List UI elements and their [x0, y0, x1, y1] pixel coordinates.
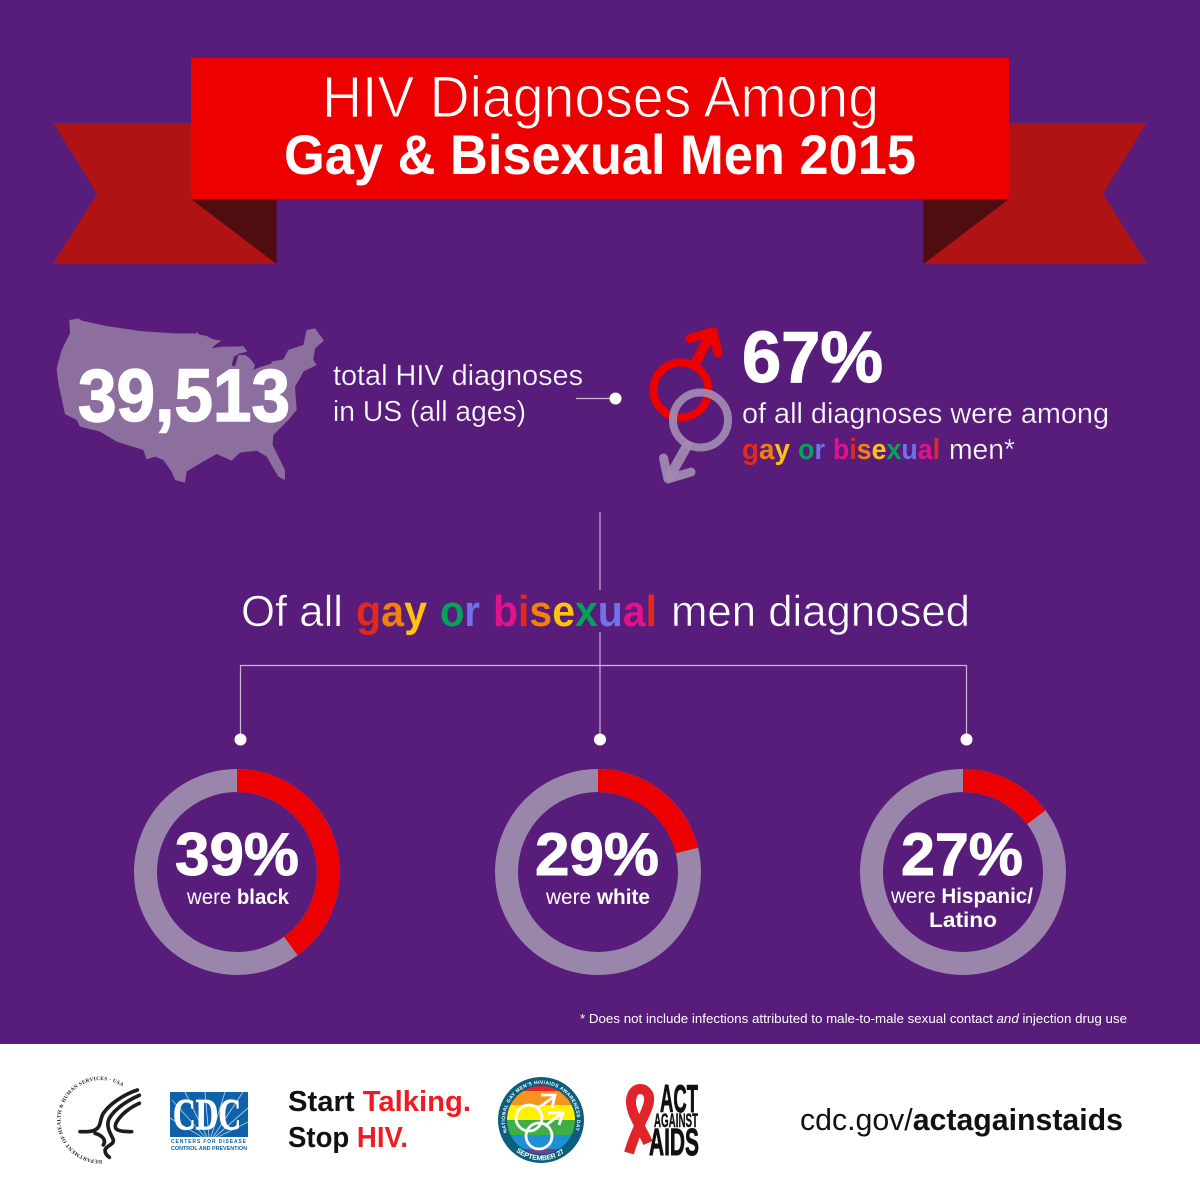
logo: CDC: CENTERS FOR DISEASE — [171, 1139, 247, 1145]
logo: National Gay Men's HIV/AIDS Awareness Day: SEPTEMBER 27 — [516, 1148, 563, 1160]
total diagnoses caption — [333, 360, 583, 428]
logo: Act Against AIDS — [629, 1078, 699, 1164]
donut: 29% white: were white — [545, 885, 650, 909]
section heading: or — [440, 587, 480, 636]
logo: National Gay Men's HIV/AIDS Awareness Day: NATIONAL GAY MEN'S HIV/AIDS AWARENESS DAY — [502, 1080, 580, 1134]
rainbow caption: or — [798, 434, 825, 466]
rainbow caption: men* — [949, 434, 1015, 466]
donut: 29% white — [506, 780, 690, 964]
section heading: men diagnosed — [671, 587, 970, 636]
section heading: bisexual — [493, 587, 657, 636]
stat: 67% — [742, 318, 1109, 430]
donut: 27% Hispanic/Latino — [872, 780, 1054, 964]
footnote: * Does not include infections attributed to male-to-male sexual contact and injection drug use — [580, 1011, 1127, 1026]
donut: 39% black — [146, 780, 328, 964]
title text — [284, 65, 916, 186]
logo: Start Talking. Stop HIV.: Stop HIV. — [288, 1122, 408, 1154]
section heading: Of all — [241, 587, 343, 636]
connector: total to 67% — [576, 392, 622, 404]
title banner — [53, 58, 1147, 264]
logo: National Gay Men's HIV/AIDS Awareness Day — [498, 1077, 584, 1163]
stat: 67%: 67% — [742, 318, 883, 398]
rainbow caption: gay — [742, 434, 790, 466]
logo: Start Talking. Stop HIV.: Start Talking. — [288, 1086, 471, 1118]
stat caption: of all diagnoses were among — [742, 398, 1109, 430]
logo: CDC: CDC — [173, 1090, 241, 1139]
donut: 29% white: 29% — [535, 821, 659, 888]
section heading: gay — [356, 587, 427, 636]
footer band — [0, 1044, 1200, 1201]
donut: 27% Hispanic/Latino: 27% — [901, 821, 1023, 888]
icon: male symbols — [654, 332, 728, 479]
rainbow caption: bisexual — [833, 434, 940, 466]
title text: Gay & Bisexual Men 2015 — [284, 123, 916, 186]
footer band: ACT — [660, 1078, 698, 1121]
US map with total diagnoses — [57, 318, 324, 483]
donut: 27% Hispanic/Latino: were Hispanic/ — [890, 884, 1033, 908]
logo: CDC — [170, 1090, 248, 1152]
rainbow caption — [742, 434, 1015, 466]
title text: HIV Diagnoses Among — [322, 65, 879, 130]
logo: HHS seal: DEPARTMENT OF HEALTH & HUMAN SERVICES · USA — [57, 1076, 123, 1164]
total diagnoses caption: total HIV diagnoses — [333, 360, 583, 392]
logo: CDC: CONTROL AND PREVENTION — [171, 1146, 247, 1152]
total diagnoses caption: in US (all ages) — [333, 396, 526, 428]
donut: 39% black: were black — [186, 885, 289, 909]
donut: 39% black: 39% — [175, 821, 299, 888]
donut: 27% Hispanic/Latino: Latino — [929, 908, 997, 932]
section heading — [241, 587, 970, 636]
logo: Act Against AIDS: AGAINST — [654, 1111, 698, 1132]
US map with total diagnoses: 39,513 — [78, 354, 290, 437]
logo: Act Against AIDS: AIDS — [649, 1122, 699, 1164]
connector tree — [234, 512, 972, 746]
website: cdc.gov/actagainstaids — [800, 1102, 1123, 1137]
logo: Start Talking. Stop HIV. — [288, 1086, 471, 1154]
